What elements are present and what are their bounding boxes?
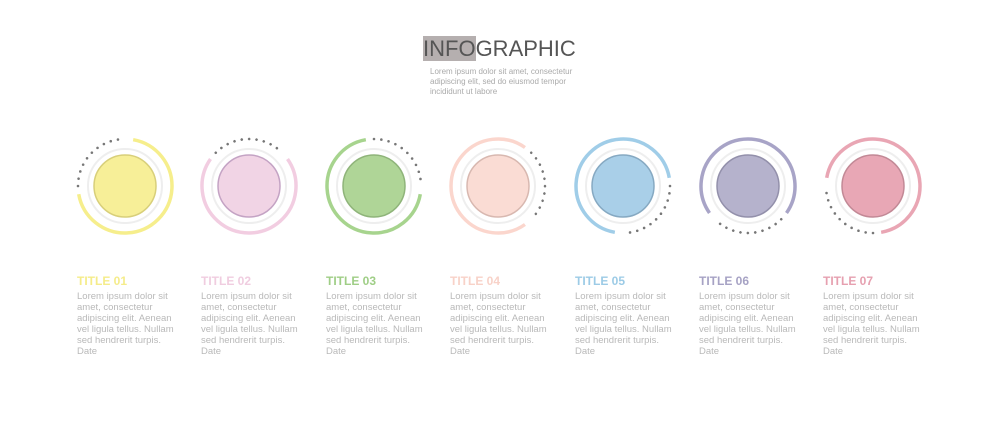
text block 2 — [201, 274, 298, 357]
text block 5: adipiscing elit. Aenean — [575, 313, 670, 324]
text block 5: amet, consectetur — [575, 302, 651, 313]
text block 7: amet, consectetur — [823, 302, 899, 313]
text block 1: TITLE 01 — [77, 274, 127, 288]
text block 2: TITLE 02 — [201, 274, 251, 288]
text block 6: sed hendrerit turpis. — [699, 335, 783, 346]
text block 2: adipiscing elit. Aenean — [201, 313, 296, 324]
text block 2: Lorem ipsum dolor sit — [201, 291, 292, 302]
text block 6: adipiscing elit. Aenean — [699, 313, 794, 324]
text block 1: amet, consectetur — [77, 302, 153, 313]
text block 3: Lorem ipsum dolor sit — [326, 291, 417, 302]
text block 5 — [575, 274, 672, 357]
text block 4: adipiscing elit. Aenean — [450, 313, 545, 324]
text block 5: Date — [575, 346, 595, 357]
text block 6: Lorem ipsum dolor sit — [699, 291, 790, 302]
text block 7 — [823, 274, 920, 357]
text block 6: vel ligula tellus. Nullam — [699, 324, 796, 335]
text block 2: vel ligula tellus. Nullam — [201, 324, 298, 335]
text block 2: amet, consectetur — [201, 302, 277, 313]
text block 7: Lorem ipsum dolor sit — [823, 291, 914, 302]
text block 7: TITLE 07 — [823, 274, 873, 288]
text block 3: TITLE 03 — [326, 274, 376, 288]
text block 1: vel ligula tellus. Nullam — [77, 324, 174, 335]
text block 4 — [450, 274, 547, 357]
text block 1: Lorem ipsum dolor sit — [77, 291, 168, 302]
text block 6 — [699, 274, 796, 357]
text block 1: sed hendrerit turpis. — [77, 335, 161, 346]
text block 3: amet, consectetur — [326, 302, 402, 313]
text block 5: vel ligula tellus. Nullam — [575, 324, 672, 335]
text block 3: adipiscing elit. Aenean — [326, 313, 421, 324]
text block 3: Date — [326, 346, 346, 357]
text block 7: sed hendrerit turpis. — [823, 335, 907, 346]
text block 7: vel ligula tellus. Nullam — [823, 324, 920, 335]
text block 6: TITLE 06 — [699, 274, 749, 288]
circle 1 — [78, 139, 172, 233]
text block 5: sed hendrerit turpis. — [575, 335, 659, 346]
text block 5: TITLE 05 — [575, 274, 625, 288]
text block 1 — [77, 274, 174, 357]
text block 6: Date — [699, 346, 719, 357]
text block 4: vel ligula tellus. Nullam — [450, 324, 547, 335]
title: INFOGRAPHIC — [423, 36, 576, 61]
text block 3 — [326, 274, 423, 357]
text block 4: amet, consectetur — [450, 302, 526, 313]
text block 7: Date — [823, 346, 843, 357]
circle 2 — [183, 120, 315, 252]
text block 1: Date — [77, 346, 97, 357]
text block 3: vel ligula tellus. Nullam — [326, 324, 423, 335]
text block 4: TITLE 04 — [450, 274, 500, 288]
text block 4: Lorem ipsum dolor sit — [450, 291, 541, 302]
text block 6: amet, consectetur — [699, 302, 775, 313]
circle 6 — [682, 120, 814, 252]
text block 4: Date — [450, 346, 470, 357]
text block 2: Date — [201, 346, 221, 357]
text block 4: sed hendrerit turpis. — [450, 335, 534, 346]
text block 3: sed hendrerit turpis. — [326, 335, 410, 346]
text block 5: Lorem ipsum dolor sit — [575, 291, 666, 302]
text block 1: adipiscing elit. Aenean — [77, 313, 172, 324]
circle 5 — [576, 139, 670, 233]
circle 4 — [432, 120, 564, 252]
circle 3 — [327, 139, 421, 233]
circle 7 — [826, 139, 920, 233]
subtitle text: Lorem ipsum dolor sit amet, consectetur adipiscing elit, sed do eiusmod tempor incididunt ut labore — [430, 67, 572, 96]
text block 7: adipiscing elit. Aenean — [823, 313, 918, 324]
text block 2: sed hendrerit turpis. — [201, 335, 285, 346]
